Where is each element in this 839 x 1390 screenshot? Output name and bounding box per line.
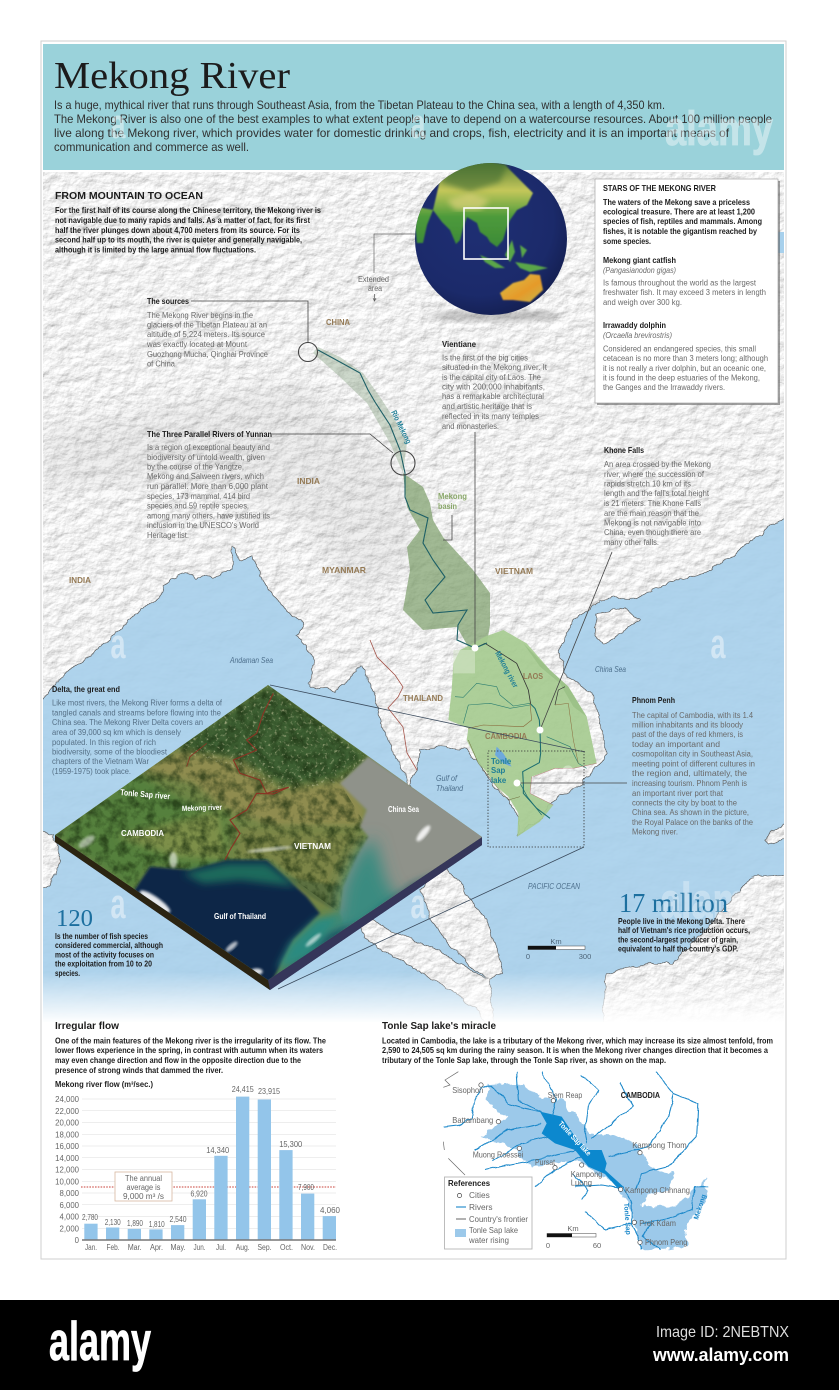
section intro: [55, 205, 321, 254]
average note: The annual: [125, 1174, 162, 1183]
city markers: [479, 1083, 642, 1244]
city labels: Mekong: [693, 1194, 708, 1221]
block labels: China Sea: [388, 804, 419, 814]
Mekong upper river: [318, 350, 487, 648]
references legend: [444, 1177, 532, 1249]
y axis labels: 22,000: [55, 1107, 80, 1116]
section intro: second half up to its mouth, the river is quieter and generally navigable,: [55, 234, 302, 244]
month labels: Nov.: [301, 1243, 315, 1252]
website: www.alamy.com: [652, 1345, 789, 1365]
stat: 120 fish species: Is the number of fish species: [55, 931, 148, 941]
panel: stars of the Mekong: [595, 179, 780, 405]
value labels: [82, 1085, 341, 1229]
value labels: 23,915: [258, 1087, 280, 1096]
callout: Khone Falls: length and the fall's total height: [604, 489, 710, 498]
stat: 120 fish species: species.: [55, 968, 80, 978]
stars intro: The waters of the Mekong save a priceless: [603, 197, 750, 207]
leader lines and dots: [191, 301, 627, 989]
city labels: Muong Roessei: [473, 1150, 523, 1160]
value labels: 1,890: [127, 1219, 143, 1228]
flow text: may even change direction and flow in the opposite direction due to the: [55, 1055, 301, 1065]
intro text: Is a huge, mythical river that runs through Southeast Asia, from the Tibetan Plateau to the China sea, with a length of 4,350 km.: [54, 98, 665, 112]
Irrawaddy dolphin: the Ganges and the Irrawaddy rivers.: [603, 383, 725, 392]
extended area note: Extended: [358, 274, 389, 284]
y axis labels: [55, 1095, 80, 1245]
callout: Khone Falls: is 21 meters. The Khone Falls: [604, 499, 701, 508]
block labels: Gulf of Thailand: [214, 911, 266, 921]
callout: Khone Falls: An area crossed by the Mekong: [604, 460, 711, 469]
map labels: MYANMAR: [322, 565, 366, 575]
callout: delta: [52, 684, 223, 776]
Mekong giant catfish: freshwater fish. It may exceed 3 meters in length: [603, 288, 766, 297]
map labels: [69, 317, 626, 891]
extended area note: area: [368, 283, 382, 293]
callout: Vientiane: city with 200,000 inhabitants,: [442, 382, 545, 392]
month labels: May.: [170, 1243, 186, 1252]
callout: Khone Falls: rapids stretch 10 km of its: [604, 480, 691, 488]
intro text: [54, 98, 772, 154]
callout: the sources: The Mekong River begins in the: [147, 311, 254, 320]
y axis labels: 20,000: [55, 1118, 80, 1128]
section intro: although it is limited by the large annual flow fluctuations.: [55, 244, 256, 254]
month labels: Mar.: [128, 1243, 142, 1252]
map labels: CHINA: [326, 317, 350, 327]
callout: the sources: of China.: [147, 360, 177, 368]
y axis labels: 12,000: [55, 1166, 80, 1174]
satellite surface: [55, 685, 482, 980]
callout: Khone Falls: Mekong is not navigable into: [604, 518, 702, 528]
month labels: Feb.: [106, 1243, 120, 1252]
city labels: Prek Kdam: [639, 1218, 676, 1228]
callout: Vientiane: is the capital city of Laos. The: [442, 373, 542, 382]
value labels: 24,415: [232, 1085, 254, 1094]
callout: Vientiane: [442, 339, 548, 431]
y axis labels: 16,000: [55, 1142, 80, 1151]
city labels: Tonle Sap: [622, 1203, 631, 1235]
map labels: Tonle: [491, 757, 512, 766]
watermark letters: a: [710, 620, 726, 667]
watermark letters: a: [410, 880, 426, 927]
callout: three parallel rivers: among many others, have justified its: [147, 512, 270, 520]
y axis labels: 18,000: [55, 1130, 80, 1139]
stat: 120 fish species: most of the activity focuses on: [55, 950, 154, 960]
month labels: Aug.: [236, 1243, 250, 1252]
bars: [84, 1097, 336, 1240]
Irrawaddy dolphin: it is found in the deep estuaries of the Mekong,: [603, 374, 760, 382]
value labels: 1,810: [149, 1220, 165, 1229]
watermark letters: a: [110, 880, 126, 927]
city labels: Sisophon: [452, 1085, 484, 1095]
watermark letters: a: [560, 750, 576, 797]
map labels: Mekong river: [493, 650, 520, 689]
callout: Phnom Penh: The capital of Cambodia, with its 1.4: [632, 711, 754, 720]
section heading: FROM MOUNTAIN TO OCEAN: [55, 190, 203, 202]
forested north: [173, 685, 368, 787]
y axis labels: 4,000: [59, 1212, 80, 1222]
map labels: China Sea: [595, 665, 626, 674]
block labels: VIETNAM: [294, 841, 331, 851]
mountain shading: [43, 380, 420, 600]
lake: [540, 1112, 623, 1189]
Mekong giant catfish: Is famous throughout the world as the largest: [603, 278, 757, 288]
callout: Phnom Penh: [632, 695, 755, 836]
title: Mekong River: [54, 55, 290, 97]
y axis labels: 24,000: [55, 1095, 80, 1104]
callout: Phnom Penh: past of the days of red khmers, is: [632, 730, 743, 739]
footer bar: [0, 1300, 839, 1390]
Tonle Sap map: [443, 1072, 708, 1251]
Mekong basin upper: [313, 347, 407, 473]
Irrawaddy dolphin: cetacean is no more than 3 meters long; although: [603, 354, 768, 363]
callout: Khone Falls: river, where the succession of: [604, 470, 705, 479]
watermark letters: a: [560, 492, 576, 539]
bar chart: river flow: [55, 1079, 341, 1252]
stat: 120 fish species: [55, 906, 163, 978]
callout: Vientiane: has a remarkable architectural: [442, 392, 544, 401]
stars heading: STARS OF THE MEKONG RIVER: [603, 183, 716, 193]
callout: delta: biodiversity, some of the bloodiest: [52, 748, 168, 756]
flow text: presence of strong winds that dammed the river.: [55, 1065, 223, 1075]
watermark alamy: [660, 103, 773, 929]
header panel: [43, 44, 784, 170]
callout: delta: area of 39,000 sq km which is densely: [52, 728, 181, 737]
map labels: INDIA: [297, 476, 320, 486]
callout: three parallel rivers: Mekong and Salween rivers, which: [147, 472, 264, 481]
Thailand and Myanmar frontier: [370, 640, 417, 770]
callout: Khone Falls: China, even though there are: [604, 528, 702, 537]
references legend: References: [448, 1179, 491, 1188]
Irrawaddy dolphin: it is not really a river dolphin, but an oceanic one,: [603, 364, 766, 373]
stars intro: ecological treasure. There are at least 1,200: [603, 206, 755, 216]
callout: Khone Falls: many other falls.: [604, 538, 659, 547]
section intro: half the river plunges down about 4,700 meters from its source. For its: [55, 225, 300, 235]
callout: delta: chapters of the Vietnam War: [52, 757, 149, 766]
3D delta satellite block: [50, 680, 490, 1003]
callout: three parallel rivers: The Three Parallel Rivers of Yunnan: [147, 429, 272, 439]
callout: the sources: glaciers of the Tibetan Plateau at an: [147, 320, 267, 330]
intro text: communication and commerce as well.: [54, 140, 249, 154]
callout: Phnom Penh: China sea. As shown in the picture,: [632, 808, 749, 817]
callout: the sources: The sources: [147, 296, 189, 306]
watermark letters: a: [110, 100, 126, 147]
stat: 17 million: People live in the Mekong Delta. There: [618, 916, 745, 926]
callout: three parallel rivers: by the course of the Yangtze,: [147, 462, 244, 472]
map labels: Andaman Sea: [229, 656, 273, 665]
city labels: Luong: [571, 1178, 592, 1188]
y axis labels: 6,000: [59, 1201, 80, 1210]
block labels: Mekong river: [182, 803, 222, 813]
map labels: lake: [491, 776, 507, 785]
alamy logo: alamy: [49, 1310, 151, 1372]
callout: delta: populated. In this region of rich: [52, 738, 156, 747]
callout: three parallel rivers: inclusion in the UNESCO's World: [147, 521, 259, 530]
river system: [455, 643, 597, 818]
map labels: PACIFIC OCEAN: [528, 882, 580, 891]
city labels: Kampong Thom: [632, 1140, 687, 1150]
intro text: The Mekong River is also one of the best examples to what extent people have to depend on a watercourse resources. About 100 million people: [54, 112, 772, 126]
month labels: Dec.: [323, 1243, 337, 1252]
map labels: basin: [438, 501, 457, 511]
extended area square: [464, 208, 508, 259]
Irrawaddy dolphin: Considered an endangered species, this small: [603, 344, 756, 354]
block labels: CAMBODIA: [121, 828, 164, 838]
map labels: Thailand: [436, 784, 463, 793]
Asia landmass: [415, 160, 533, 247]
callout: Phnom Penh: million inhabitants and its bloody: [632, 720, 743, 730]
main map scale bar: 300: [579, 952, 591, 961]
stat: 17 million: 17 million: [619, 888, 728, 918]
stat: 17 million: equivalent to half the country's GDP.: [618, 944, 738, 954]
watermark letters: [110, 100, 726, 927]
map labels: INDIA: [69, 575, 91, 585]
stars intro: species of fish, reptiles and mammals. Among: [603, 216, 762, 226]
map labels: Mekong: [438, 491, 467, 501]
clouds: [138, 888, 172, 914]
y axis labels: 2,000: [59, 1224, 80, 1233]
Tonle Sap text: Located in Cambodia, the lake is a tributary of the Mekong river, which may increase its size almost tenfold, from: [382, 1036, 773, 1046]
main map scale bar: [526, 937, 591, 961]
references legend: water rising: [468, 1235, 509, 1245]
Australia: [500, 274, 543, 302]
callout: Phnom Penh: connects the city by boat to the: [632, 798, 738, 808]
y axis labels: 14,000: [55, 1154, 80, 1163]
callout: Vientiane: reflected in its many temples: [442, 412, 539, 421]
globe: [415, 160, 567, 322]
callout: three parallel rivers: run parallel. More than 6,000 plant: [147, 482, 269, 491]
Irrawaddy dolphin: [603, 320, 768, 392]
callout: delta: Delta, the great end: [52, 684, 120, 694]
callout: Phnom Penh: Mekong river.: [632, 828, 678, 836]
callout: Vientiane: situated in the Mekong river. It: [442, 363, 548, 372]
extended area note: [358, 234, 464, 301]
callout: the sources: Guozhong Mucha, Qinghai Province: [147, 350, 269, 359]
value labels: 4,060: [320, 1206, 341, 1215]
callout: Phnom Penh: today an important and: [632, 740, 720, 749]
references legend: Country's frontier: [469, 1214, 528, 1224]
callout: Phnom Penh: cosmopolitan city in Southeast Asia,: [632, 750, 753, 758]
callout: Vientiane: and artistic heritage that is: [442, 402, 532, 411]
relief map: [28, 158, 803, 1040]
callout: Vientiane: and monasteries.: [442, 422, 499, 431]
references legend: Cities: [469, 1190, 490, 1200]
month labels: Oct.: [280, 1243, 293, 1252]
callout: delta: Like most rivers, the Mekong River forms a delta of: [52, 698, 223, 708]
stat: 17 million: the second-largest producer of grain,: [618, 934, 738, 944]
Mekong giant catfish: [603, 255, 766, 307]
lake map scale: Km: [567, 1224, 579, 1233]
stat: 17 million: [618, 888, 750, 954]
callout: Phnom Penh: Phnom Penh: [632, 695, 675, 705]
Tonle Sap text: 2,590 to 24,505 sq km during the rainy season. It is when the Mekong river changes direction that it becomes a: [382, 1045, 768, 1055]
Irrawaddy dolphin: (Orcaella brevirostris): [603, 331, 672, 340]
stat: 120 fish species: 120: [56, 906, 93, 932]
Tonle Sap text: [382, 1036, 773, 1065]
map labels: VIETNAM: [495, 566, 533, 576]
block labels: [120, 787, 419, 921]
flow heading: Irregular flow: [55, 1020, 120, 1032]
callout: Vientiane: Is the first of the big cities: [442, 354, 528, 362]
lake map scale: [546, 1224, 601, 1250]
value labels: 15,300: [279, 1140, 303, 1149]
y axis labels: 10,000: [55, 1177, 80, 1186]
map labels: Gulf of: [436, 774, 458, 783]
Tonle Sap heading: Tonle Sap lake's miracle: [382, 1020, 496, 1032]
section intro: For the first half of its course along the Chinese territory, the Mekong river is: [55, 205, 321, 215]
water rising area: [482, 1083, 708, 1251]
Mekong basin lower and delta: [448, 630, 597, 837]
callout: three parallel rivers: biodiversity of untold wealth, given: [147, 453, 265, 462]
lake map scale: 0: [546, 1241, 550, 1250]
Tonle Sap text: tributary of the Tonle Sap lake, through the Tonle Sap river, as shown on the map.: [382, 1055, 666, 1065]
Irrawaddy dolphin: Irrawaddy dolphin: [603, 320, 666, 330]
lake map scale: 60: [593, 1241, 601, 1250]
bar chart: river flow: Mekong river flow (m³/sec.): [55, 1079, 153, 1089]
month labels: Apr.: [150, 1243, 163, 1252]
city labels: Siem Reap: [548, 1090, 583, 1100]
stat: 120 fish species: considered commercial, although: [55, 940, 163, 950]
map labels: LAOS: [523, 671, 543, 681]
value labels: 14,340: [206, 1146, 230, 1155]
city labels: Battambang: [452, 1115, 494, 1125]
section: irregular flow: [55, 1020, 341, 1252]
stars intro: [603, 197, 762, 246]
value labels: 7,900: [298, 1183, 314, 1192]
Mekong basin middle: [403, 473, 490, 650]
average note: 9,000 m³ /s: [123, 1192, 164, 1201]
callout: three parallel rivers: [147, 429, 272, 540]
references legend: Rivers: [469, 1202, 493, 1212]
value labels: 2,540: [170, 1215, 187, 1224]
map labels: Río Mekong: [389, 409, 413, 445]
month labels: Jun.: [194, 1243, 206, 1252]
callout: delta: (1959-1975) took place.: [52, 767, 131, 776]
month labels: Sep.: [258, 1243, 272, 1252]
average note: average is: [126, 1183, 160, 1192]
callout: Phnom Penh: an important river port that: [632, 789, 724, 798]
watermark letters: a: [410, 100, 426, 147]
callout: Phnom Penh: meeting point of different cultures in: [632, 760, 755, 768]
callout: Phnom Penh: increasing tourism. Phnom Penh is: [632, 779, 747, 788]
callout: the sources: [146, 296, 269, 368]
average note: [115, 1172, 172, 1201]
city labels: Phnom Peng: [645, 1237, 688, 1247]
callout: the sources: altitude of 5,224 meters. Its source: [147, 330, 266, 339]
bottom fade of map: [43, 972, 784, 1023]
watermark alamy: alamy: [660, 873, 767, 929]
rivers: [443, 1072, 708, 1250]
city labels: CAMBODIA: [621, 1090, 660, 1100]
watermark alamy: alamy: [665, 103, 773, 156]
block edges: [55, 835, 482, 990]
city labels: [452, 1085, 708, 1247]
callout: Phnom Penh: the Royal Palace on the banks of the: [632, 818, 753, 827]
outer frame: [41, 41, 786, 1259]
city labels: Tonle Sap lake: [557, 1119, 593, 1158]
callout: Phnom Penh: the region and, ultimately, the: [632, 769, 748, 778]
stars intro: some species.: [603, 236, 651, 246]
callout: Khone Falls: are the main reason that the: [604, 509, 700, 518]
city labels: Pursat: [535, 1157, 556, 1167]
callout: three parallel rivers: species and 59 reptile species,: [147, 502, 249, 510]
annual average line: [81, 1186, 336, 1188]
callout: three parallel rivers: species, 173 mammal, 414 bird: [147, 492, 250, 501]
flow text: One of the main features of the Mekong river is the irregularity of its flow. The: [55, 1036, 326, 1046]
callout: Khone Falls: Khone Falls: [604, 445, 644, 455]
callout: three parallel rivers: Heritage list.: [147, 531, 189, 540]
grey China Sea: [340, 756, 482, 928]
y axis labels: 8,000: [59, 1189, 80, 1198]
month labels: [85, 1243, 337, 1252]
frontier lines: [443, 1072, 458, 1087]
Mekong giant catfish: Mekong giant catfish: [603, 255, 676, 265]
map labels: Sap: [491, 766, 506, 775]
image id: Image ID: 2NEBTNX: [656, 1324, 789, 1341]
month labels: Jan.: [85, 1243, 97, 1252]
stat: 17 million: half of Vietnam's rice production occurs,: [618, 925, 750, 935]
y axis labels: 0: [75, 1236, 80, 1245]
watermark letters: a: [110, 620, 126, 667]
callout: delta: tangled canals and streams before flowing into the: [52, 708, 222, 718]
intro text: live along the Mekong river, which provides water for domestic drinking and crops, fish, electricity and it is an important means of: [54, 126, 730, 140]
flow text: lower flows experience in the spring, in contrast with autumn when its waters: [55, 1045, 323, 1055]
references legend: Tonle Sap lake: [469, 1225, 518, 1235]
stat: 120 fish species: the exploitation from 10 to 20: [55, 958, 152, 968]
section: from mountain to ocean: [55, 190, 321, 254]
flow text: [55, 1036, 326, 1075]
stars intro: fishes, it is notable the gigantism reached by: [603, 226, 757, 236]
map labels: THAILAND: [403, 693, 443, 703]
month labels: Jul.: [216, 1243, 226, 1252]
section intro: not navigable due to many rapids and falls. As a matter of fact, for its first: [55, 215, 310, 225]
block labels: Tonle Sap river: [120, 787, 171, 801]
main map scale bar: 0: [526, 952, 530, 961]
city labels: Kampong Chhnang: [625, 1185, 690, 1195]
value labels: 6,920: [190, 1190, 208, 1199]
callout: Khone Falls: [604, 445, 711, 547]
axis baseline: [82, 1239, 336, 1241]
callout: three parallel rivers: Is a region of exceptional beauty and: [147, 443, 270, 452]
section: Tonle Sap: [382, 1020, 773, 1251]
Mekong giant catfish: and weigh over 300 kg.: [603, 298, 682, 307]
Mekong giant catfish: (Pangasianodon gigas): [603, 266, 676, 275]
city labels: Kampong: [571, 1169, 603, 1179]
value labels: 2,130: [105, 1218, 121, 1227]
callout: the sources: was exactly located at Mount: [146, 340, 248, 349]
main map scale bar: Km: [550, 937, 562, 946]
callout: Vientiane: Vientiane: [442, 339, 476, 349]
callout: delta: China sea. The Mekong River Delta covers an: [52, 718, 203, 727]
value labels: 2,780: [82, 1213, 98, 1222]
map labels: CAMBODIA: [485, 731, 527, 741]
red river: [225, 693, 288, 860]
